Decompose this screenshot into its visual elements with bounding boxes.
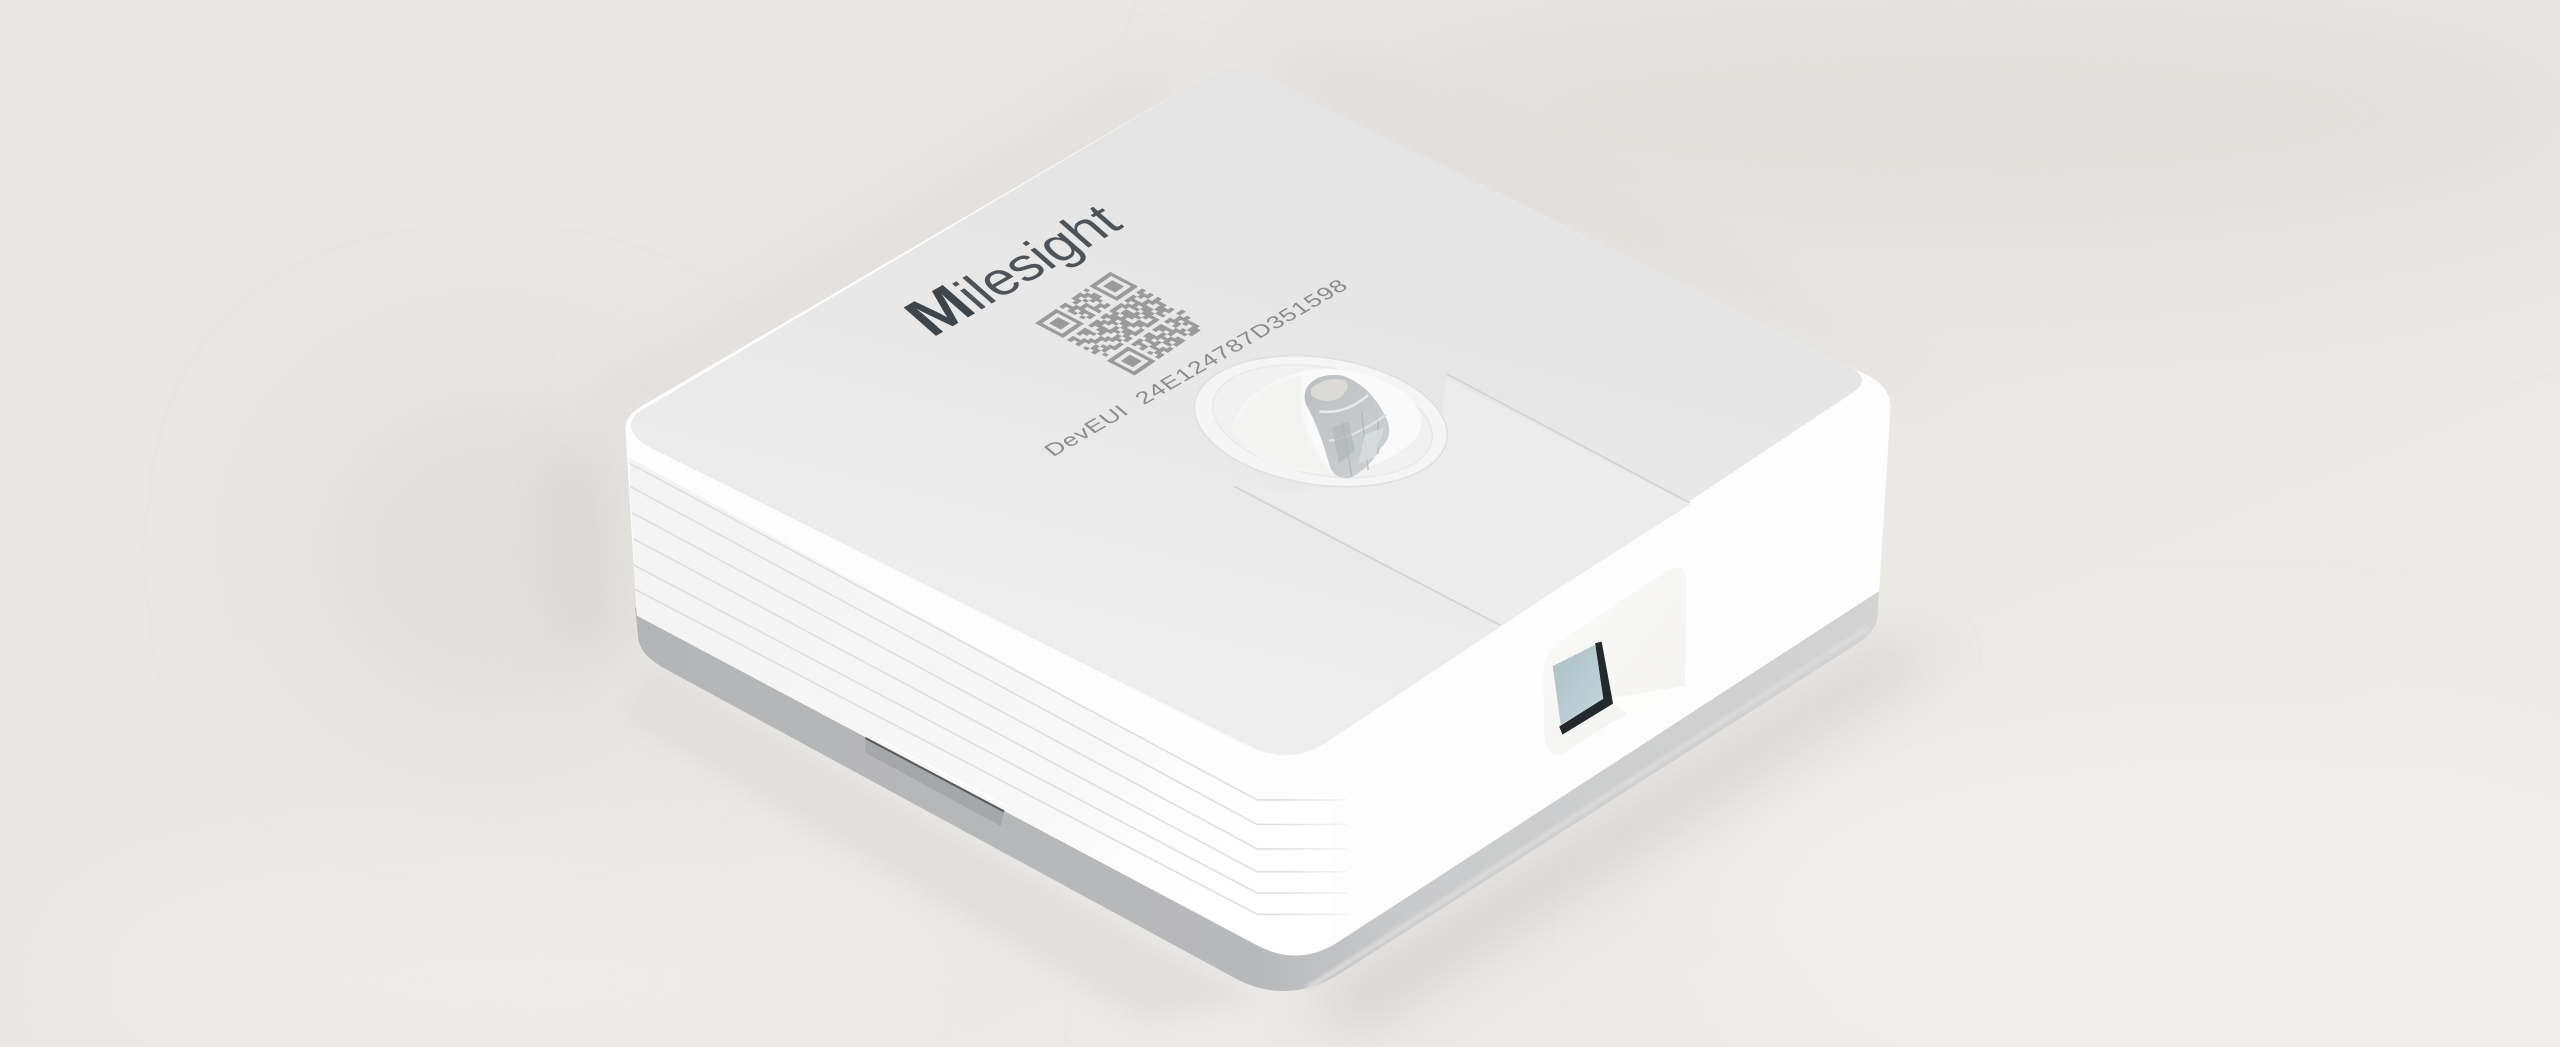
device ID text: DevEUI 24E124787D351598 [1039, 275, 1353, 460]
device body [625, 69, 1891, 991]
sensor lip [1562, 705, 1613, 736]
sensor dark bezel [1559, 642, 1613, 735]
left side layered ridges [630, 464, 1347, 914]
lens [1304, 375, 1389, 478]
lid panel around sensor [1241, 379, 1690, 625]
lid top face [631, 69, 1862, 755]
cast shadows around device [539, 49, 1943, 1037]
motion sensor dome [1186, 340, 1456, 502]
sensor recess [1543, 568, 1687, 755]
QR code [1037, 273, 1208, 374]
grey base plate [635, 584, 1879, 991]
dome outer ring [1186, 340, 1456, 502]
side slot [865, 736, 1007, 826]
dome inner ring [1204, 349, 1441, 494]
lid seams [1234, 374, 1690, 625]
base highlight [1306, 627, 1869, 989]
sensor glass [1553, 645, 1603, 725]
left side face [629, 457, 1331, 956]
dome white cap [1233, 369, 1421, 473]
logo: Milesight: Milesight [891, 190, 1135, 347]
front distance sensor [1543, 568, 1687, 755]
white shell [625, 69, 1891, 956]
